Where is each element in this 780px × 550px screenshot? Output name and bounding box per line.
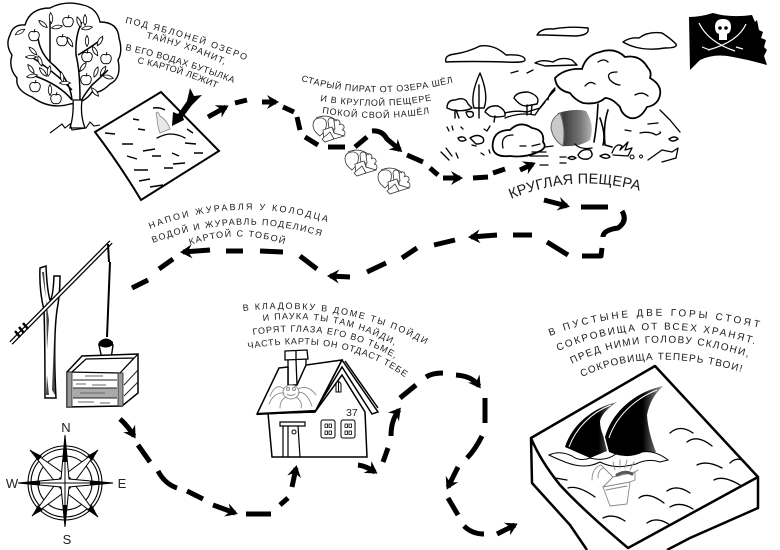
bucket	[99, 340, 113, 359]
spider	[269, 385, 316, 408]
icon: compass rose	[6, 420, 127, 547]
text: crane verse line 2: ВОДОЙ И ЖУРАВЛЬ ПОДЕЛИСЯ	[152, 218, 322, 243]
icon: apple tree	[8, 3, 121, 133]
text: old pirate verse: СТАРЫЙ ПИРАТ ОТ ОЗЕРА ШЁЛ	[302, 76, 452, 92]
cave barrel	[554, 110, 592, 146]
text: verse line 3: В ЕГО ВОДАХ БУТЫЛКА	[126, 44, 234, 83]
bottle	[156, 112, 170, 133]
tree canopy	[8, 3, 121, 106]
icon: compass rose: E	[118, 476, 127, 491]
panel: lake with bottle	[95, 88, 219, 200]
well box	[67, 354, 138, 407]
desert block	[531, 366, 758, 550]
lake outline	[95, 92, 219, 200]
roof	[257, 360, 342, 414]
sweep beam	[11, 242, 111, 343]
text: crane verse line 3: КАРТОЙ С ТОБОЙ	[188, 228, 286, 245]
icon: strawberry cluster 1	[313, 116, 345, 142]
island	[157, 134, 185, 138]
desert waves	[555, 428, 745, 525]
chimney	[288, 358, 306, 386]
house walls	[268, 375, 367, 457]
attic window	[336, 381, 341, 392]
grass	[50, 122, 100, 133]
forked post	[40, 266, 60, 398]
ground details	[530, 123, 678, 165]
icon: strawberry cluster 2	[345, 150, 377, 176]
tufts and marks	[441, 70, 533, 160]
oak canopy	[555, 50, 660, 118]
text: pantry verse: В КЛАДОВКУ В ДОМЕ ТЫ ПОЙДИ	[243, 302, 428, 344]
clouds	[446, 27, 676, 66]
text: pirate verse line 2: И В КРУГЛОЙ ПЕЩЕРЕ	[320, 94, 431, 106]
big arrow to the bottle	[172, 88, 202, 126]
path: cave to well	[132, 200, 624, 288]
text: verse line 2: ТАЙНУ ХРАНИТ,	[148, 32, 224, 66]
path: lake to cave	[208, 100, 533, 178]
text: pantry verse line 2: И ПАУКА ТЫ ТАМ НАЙДИ,	[263, 312, 394, 346]
apples	[14, 12, 114, 104]
path: well to house	[120, 419, 296, 514]
bush	[493, 124, 545, 156]
text: verse line 4: С КАРТОЙ ЛЕЖИТ	[138, 58, 218, 88]
text: desert verse line 4: СОКРОВИЩА ТЕПЕРЬ ТВОИ!	[580, 352, 742, 376]
treasure chest	[592, 460, 638, 506]
text: desert verse line 2: СОКРОВИЩА ОТ ВСЕХ ХРАНЯТ.	[556, 322, 754, 350]
cardinal ray tips	[18, 435, 113, 527]
icon: compass rose: S	[63, 532, 72, 547]
cardinal rays	[18, 435, 113, 527]
door	[280, 422, 305, 457]
icon: shadoof well	[11, 242, 138, 407]
chimney cap	[285, 350, 308, 385]
small trees and cypress	[447, 73, 545, 122]
compass labels: N	[61, 420, 71, 435]
flag cloth	[689, 13, 767, 70]
text: apple tree verse: ПОД ЯБЛОНЕЙ ОЗЕРО	[126, 17, 247, 60]
text: pantry verse line 3: ГОРЯТ ГЛАЗА ЕГО ВО ТЬМЕ,	[252, 325, 395, 359]
icon: house with spider	[257, 350, 378, 457]
tree trunk and branches	[30, 14, 108, 105]
rope and pole	[107, 244, 110, 337]
skull	[715, 19, 731, 40]
text: pantry verse line 4: ЧАСТЬ КАРТЫ ОН ОТДАСТ ТЕБЕ	[248, 338, 408, 378]
gable	[315, 360, 378, 414]
panel: desert with two mountains and treasure	[531, 366, 758, 550]
cave mound	[505, 88, 680, 132]
compass rings	[28, 446, 102, 520]
wavy sand at mountain foot	[549, 452, 668, 467]
text: pirate verse line 3: ПОКОЙ СВОЙ НАШЁЛ	[322, 107, 429, 118]
lake waves	[105, 108, 203, 187]
icon: strawberry cluster 3	[378, 168, 410, 194]
mountains	[565, 402, 617, 458]
windows	[321, 420, 355, 438]
diagonal rays	[30, 450, 98, 517]
crossed sabres	[699, 23, 746, 51]
house number: 37	[346, 407, 358, 419]
oak trunk	[594, 104, 612, 147]
text: desert verse line 3: ПРЕД НИМИ ГОЛОВУ СКЛОНИ,	[570, 336, 748, 364]
path: house to treasure	[358, 373, 515, 534]
text: desert verse: В ПУСТЫНЕ ДВЕ ГОРЫ СТОЯТ	[548, 308, 760, 336]
text: crane verse: НАПОИ ЖУРАВЛЯ У КОЛОДЦА	[148, 204, 328, 229]
text: round cave label: КРУГЛАЯ ПЕЩЕРА	[508, 174, 640, 198]
icon: pirate flag	[689, 13, 767, 70]
icon: compass rose: W	[6, 476, 19, 491]
panel: cave landscape	[441, 27, 680, 165]
